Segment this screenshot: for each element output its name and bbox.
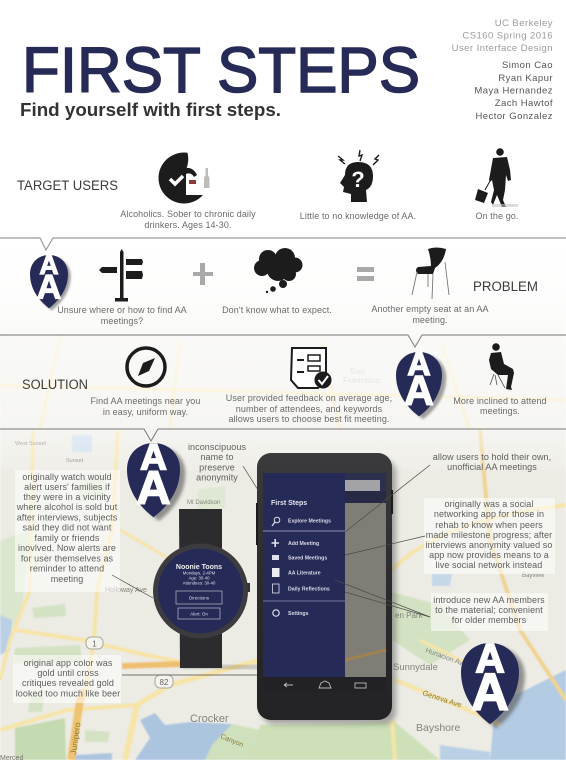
white fade overlay (0, 0, 566, 470)
icon: signpost (99, 249, 143, 302)
watch band (179, 509, 222, 668)
note: watch alerts: where alcohol is sold but (16, 502, 118, 512)
caption: inclined to attend: More inclined to attend (453, 396, 547, 406)
note: inconspicuous name (188, 442, 246, 482)
watch face: Mondays, 2-4PM (183, 570, 216, 576)
android navigation bar (263, 677, 386, 692)
note: original app colour: original app color was (24, 658, 113, 668)
caption: alcoholics: drinkers. Ages 14-30. (144, 220, 232, 230)
caption: empty seat (371, 304, 489, 325)
course info (452, 18, 553, 54)
note: watch alerts: family or friends (35, 533, 100, 543)
note: watch alerts: alert users' families if (24, 482, 110, 492)
note: watch alerts: reminder to attend (30, 564, 104, 574)
watch face (153, 544, 248, 638)
watch face: Noonie Toons (176, 564, 222, 571)
navigation drawer: Explore Meetings (288, 518, 331, 524)
navigation drawer: First Steps (271, 500, 307, 507)
note: original app colour: gold until cross (37, 668, 99, 678)
icon: seated man (489, 343, 514, 390)
map labels: Geneva Ave (421, 688, 463, 709)
icon: AA pin, large (461, 635, 525, 728)
team names: Hector Gonzalez (475, 111, 553, 122)
caption: empty seat: Another empty seat at an AA (371, 304, 489, 314)
map labels: Sunset (66, 458, 84, 464)
team names (474, 60, 553, 122)
map labels: Holloway Ave (105, 587, 147, 594)
note: AA literature: for older members (452, 615, 527, 625)
note: social networking origin: rehab to know when peers (435, 520, 543, 530)
icon: confused head (338, 150, 379, 202)
note: inconspicuous name: inconscipuous (188, 442, 246, 452)
watch face: Alert: On (190, 612, 208, 616)
note: social networking origin: originally was a social (445, 499, 533, 509)
title: FIRST STEPS (22, 34, 420, 106)
map labels: Crocker (190, 713, 229, 725)
icon: AA pin, app (127, 436, 185, 521)
icon: confused head: ? (351, 167, 365, 192)
problem section divider (0, 238, 566, 250)
note: AA literature: to the material; convenient (435, 605, 543, 615)
map labels: San (350, 366, 365, 376)
note: inconspicuous name: name to (200, 452, 234, 462)
team names: Maya Hernandez (474, 86, 553, 96)
note: watch alerts: after interviews, subjects (17, 512, 118, 522)
course info: UC Berkeley (495, 18, 553, 29)
navigation drawer: Add Meeting (288, 541, 319, 547)
icon: AA pin, problem: A (37, 269, 61, 307)
map labels: Francisco (343, 375, 380, 385)
details section divider (0, 429, 566, 441)
highway shields: 82 (160, 678, 169, 687)
caption: alcoholics: Alcoholics. Sober to chronic daily (120, 209, 256, 219)
icon: AA pin, solution: A (407, 346, 431, 382)
course info: User Interface Design (452, 43, 553, 54)
note: inconspicuous name: preserve (199, 462, 235, 472)
note: original app colour (16, 658, 120, 698)
note: original app colour: looked too much like beer (16, 688, 120, 698)
caption: user feedback: User provided feedback on average age, (226, 393, 392, 403)
note: watch alerts (16, 472, 118, 584)
note: AA literature (433, 595, 545, 625)
caption: user feedback: number of attendees, and keywords (236, 404, 383, 414)
caption: user feedback: allows users to choose best fit meeting. (228, 414, 390, 424)
note: social networking origin: live social network instead (436, 560, 542, 570)
icon: compass (127, 348, 165, 386)
caption: unsure where: Unsure where or how to find AA (57, 305, 187, 315)
heading: target users: TARGET USERS (17, 178, 118, 193)
caption: unsure where (57, 305, 187, 326)
note: original app colour: critiques revealed gold (22, 678, 114, 688)
caption: find meetings: in easy, uniform way. (103, 407, 188, 417)
note: watch alerts: inovlved. Now alerts are (18, 543, 116, 553)
note: social networking origin: networking app for those in (434, 509, 544, 519)
note: social networking origin (426, 499, 552, 570)
solution section divider (0, 335, 566, 347)
caption: on the go: On the go. (475, 211, 519, 221)
map labels: Canyon (219, 733, 244, 749)
note: unofficial meetings: allow users to hold their own, (433, 452, 551, 462)
navigation drawer: Settings (288, 611, 309, 617)
heading: solution: SOLUTION (22, 377, 88, 392)
watch face: Attendees: 30-40 (183, 580, 216, 586)
icon: AA pin, large: A (475, 635, 505, 681)
note: unofficial meetings: unofficial AA meetings (447, 462, 537, 472)
caption: inclined to attend: meetings. (480, 406, 520, 416)
icon: feedback form (291, 348, 332, 388)
navigation drawer: AA Literature (288, 570, 321, 576)
map labels: en Park (395, 611, 424, 620)
icon: AA pin, problem: A (39, 250, 59, 280)
course info: CS160 Spring 2016 (462, 30, 553, 42)
highway shields (86, 637, 173, 688)
map labels: Hunacion Ave (424, 647, 467, 669)
note: watch alerts: they were in a vicinity (23, 492, 111, 502)
map labels: Bayview (522, 573, 545, 579)
note: unofficial meetings (433, 452, 551, 472)
icon: alcoholic check circle (158, 150, 214, 204)
note: social networking origin: made milestone progress; after (426, 530, 552, 540)
icon: thought cloud (254, 248, 302, 293)
note: AA literature: introduce new AA members (433, 595, 545, 605)
icon: AA pin, solution (396, 346, 446, 419)
note: social networking origin: app now provides means to a (429, 550, 549, 560)
note: social networking origin: interviews anonymity valued so (426, 540, 552, 550)
watch face: Directions (189, 596, 210, 600)
note backing panels (13, 470, 555, 703)
navigation drawer: Daily Reflections (288, 586, 330, 592)
equals sign (357, 267, 374, 281)
note: watch alerts: originally watch would (22, 472, 112, 482)
team names: Simon Cao (502, 60, 553, 71)
team names: Ryan Kapur (498, 73, 553, 84)
caption: inclined to attend (453, 396, 547, 416)
team names: Zach Hawtof (495, 98, 553, 109)
map labels: West Sunset (15, 441, 47, 447)
icon: AA pin, app: A (136, 462, 171, 515)
note: inconspicuous name: anonymity (196, 472, 238, 482)
map labels: Mt Davidson (187, 500, 220, 506)
caption: find meetings (90, 396, 201, 417)
caption: user feedback (226, 393, 392, 424)
caption: what to expect: Don't know what to expect. (222, 305, 332, 315)
smartwatch (153, 509, 262, 669)
map labels: Junipero (68, 721, 83, 755)
highway shields: 1 (92, 640, 97, 648)
caption: find meetings: Find AA meetings near you (90, 396, 201, 406)
smartphone (256, 453, 396, 724)
icon: empty chair (412, 248, 449, 299)
icon: AA pin, large: A (471, 664, 509, 722)
caption: alcoholics (120, 209, 256, 230)
plus sign (193, 263, 213, 285)
map labels: Bayshore (416, 722, 461, 734)
watch face: Age: 30-40 (188, 576, 210, 580)
tagline: Find yourself with first steps. (20, 100, 281, 120)
map labels: Sunnydale (393, 662, 438, 673)
icon: AA pin, app: A (140, 435, 167, 477)
heading: problem: PROBLEM (473, 279, 538, 294)
note: watch alerts: said they did not want (23, 522, 112, 532)
connector lines (112, 465, 430, 675)
note: watch alerts: meeting (51, 574, 83, 584)
caption: unsure where: meetings? (101, 316, 143, 326)
map labels (0, 366, 545, 760)
note: watch alerts: for user themselves as (21, 554, 114, 564)
icon: AA pin, problem (30, 250, 71, 310)
navigation drawer: Saved Meetings (288, 556, 327, 562)
caption: little knowledge: Little to no knowledge of AA. (300, 211, 416, 221)
icon: AA pin, solution: A (404, 368, 434, 414)
caption: empty seat: meeting. (412, 315, 448, 325)
icon: traveller with suitcase (475, 148, 518, 207)
navigation drawer (263, 473, 345, 677)
map screen behind drawer (263, 473, 386, 677)
